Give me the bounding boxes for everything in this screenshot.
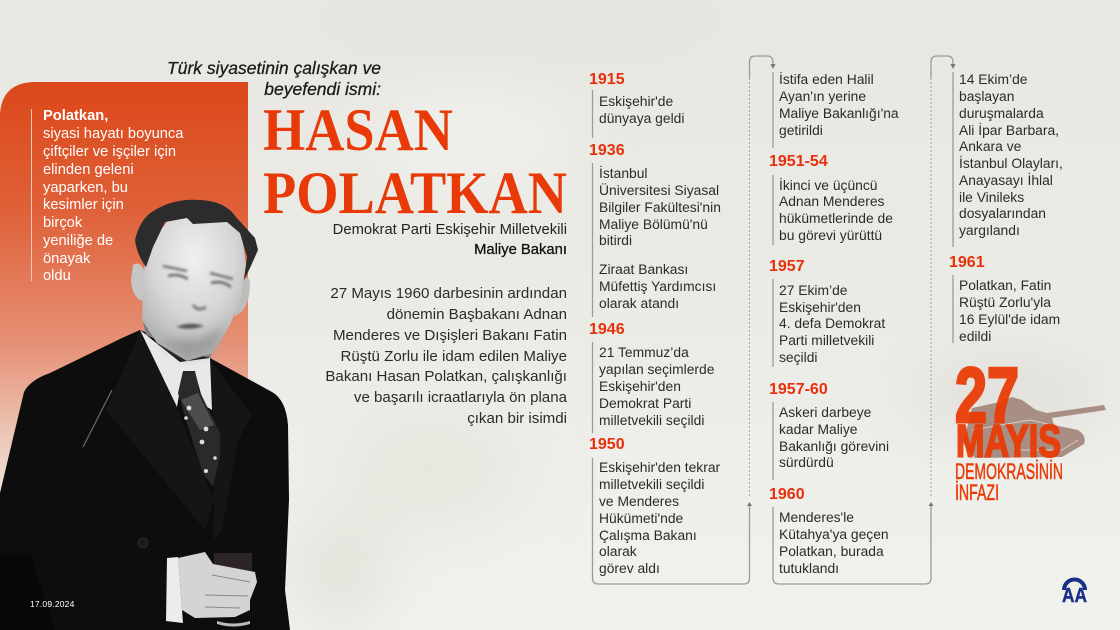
timeline column 1: dünyaya geldi [599,110,684,126]
date: 17.09.2024 [30,599,75,609]
subtitle: Maliye Bakanı [474,242,567,258]
timeline column 2: hükümetlerinde de [779,210,893,226]
intro paragraph: ve başarılı icraatlarıyla ön plana [354,389,567,406]
timeline column 1: 21 Temmuz’da [599,344,689,360]
timeline column 1: 1950 [589,436,625,453]
timeline column 2: 1960 [769,486,805,503]
timeline column 3: 14 Ekim’de [959,71,1027,87]
callout: Polatkan note: yeniliğe de [43,233,113,249]
timeline column 1 [589,71,721,576]
intro paragraph: Menderes ve Dışişleri Bakanı Fatin [333,327,567,344]
timeline column 3: edildi [959,328,991,344]
timeline column 1: İstanbul [599,165,648,181]
intro paragraph: Bakanı Hasan Polatkan, çalışkanlığı [325,368,567,385]
callout: Polatkan note: yaparken, bu [43,180,128,196]
necktie [178,371,220,487]
timeline column 1: olarak atandı [599,295,679,311]
timeline column 1: Maliye Bölümü'nü [599,216,708,232]
timeline column 2: getirildi [779,122,823,138]
timeline column 2: 27 Ekim’de [779,282,847,298]
title [263,98,567,223]
timeline column 1: Müfettiş Yardımcısı [599,278,716,294]
timeline column 1: 1936 [589,142,625,159]
timeline column 1: Hükümeti'nde [599,510,683,526]
timeline column 2: İkinci ve üçüncü [779,177,878,193]
intro paragraph: 27 Mayıs 1960 darbesinin ardından [330,285,567,302]
lapels and jacket shading [106,332,252,540]
title: HASAN [263,98,453,164]
timeline column 1: Ziraat Bankası [599,261,688,277]
timeline column 2: Polatkan, burada [779,543,884,559]
timeline column 1: Eskişehir'den tekrar [599,459,720,475]
subtitle [333,222,567,258]
timeline column 3: yargılandı [959,222,1020,238]
callout: Polatkan note: Polatkan, [43,108,108,124]
timeline column 1: Eskişehir'de [599,93,673,109]
year 1915: 1915 [589,71,625,88]
timeline column 3: başlayan [959,88,1014,104]
callout: Polatkan note: kesimler için [43,197,124,213]
intro paragraph: çıkan bir isimdi [467,410,567,427]
head [131,200,258,361]
timeline column 1: milletvekili seçildi [599,412,704,428]
timeline column 1: milletvekili seçildi [599,476,704,492]
shirt [140,330,212,410]
timeline column 2: Askeri darbeye [779,404,871,420]
intro paragraph [325,285,567,427]
timeline column 2: tutuklandı [779,560,839,576]
timeline column 3: ile Vinileks [959,189,1024,205]
timeline column 3: Rüştü Zorlu'yla [959,294,1051,310]
timeline column 3: İstanbul Olayları, [959,155,1063,171]
27 Mayıs logo with tank [955,360,1106,505]
hand and glass [166,552,257,626]
timeline column 2: Ayan'ın yerine [779,88,866,104]
callout: Polatkan note: çiftçiler ve işçiler için [43,144,176,160]
27 Mayıs logo with tank: İNFAZI [955,480,999,505]
icon: tank [962,397,1106,458]
timeline column 1: görev aldı [599,560,660,576]
timeline column 2: İstifa eden Halil [779,71,874,87]
kicker heading [167,58,381,99]
timeline column 1: bitirdi [599,232,632,248]
timeline column 1: 1946 [589,321,625,338]
timeline column 2: bu görevi yürüttü [779,227,882,243]
timeline column 2: seçildi [779,349,817,365]
timeline column 3: Anayasayı İhlal [959,172,1053,188]
timeline column 3: Polatkan, Fatin [959,277,1051,293]
timeline column 1: yapılan seçimlerde [599,361,714,377]
timeline column 3: dosyalarından [959,205,1046,221]
timeline column 2: Adnan Menderes [779,193,884,209]
portrait photo [0,200,290,630]
27 Mayıs logo with tank: MAYIS [956,416,1061,466]
timeline column 2: Kütahya'ya geçen [779,526,889,542]
timeline column 2: 1951-54 [769,153,828,170]
timeline column 2: Bakanlığı görevini [779,438,889,454]
timeline column 3: Ali İpar Barbara, [959,122,1059,138]
timeline column 1: Eskişehir'den [599,378,681,394]
timeline column 1: olarak [599,543,637,559]
timeline connector lines [592,55,956,585]
timeline column 1: Bilgiler Fakültesi'nin [599,199,721,215]
kicker heading: Türk siyasetinin çalışkan ve [167,58,381,78]
callout: Polatkan note: siyasi hayatı boyunca [43,126,183,142]
timeline column 1: Üniversitesi Siyasal [599,182,719,198]
timeline column 3: duruşmalarda [959,105,1044,121]
timeline column 2: Maliye Bakanlığı'na [779,105,899,121]
timeline column 3: 16 Eylül'de idam [959,311,1060,327]
timeline column 1: Demokrat Parti [599,395,691,411]
AA logo [1062,578,1087,605]
callout: Polatkan note: birçok [43,215,82,231]
timeline column 2: 4. defa Demokrat [779,315,885,331]
timeline column 3: Ankara ve [959,138,1021,154]
timeline column 2: Menderes'le [779,509,854,525]
timeline column 2: Parti milletvekili [779,332,874,348]
intro paragraph: Rüştü Zorlu ile idam edilen Maliye [340,348,567,365]
callout: Polatkan note: elinden geleni [43,162,134,178]
orange panel [0,82,248,492]
callout: Polatkan note [31,108,184,284]
neck [142,318,216,358]
suit [0,330,290,630]
timeline column 2: sürdürdü [779,454,834,470]
subtitle: Demokrat Parti Eskişehir Milletvekili [333,222,567,238]
timeline column 2 [769,71,899,576]
timeline column 3 [949,71,1063,344]
timeline column 3: 1961 [949,254,985,271]
timeline column 2: kadar Maliye [779,421,857,437]
timeline column 2: Eskişehir'den [779,299,861,315]
callout: Polatkan note: önayak [43,251,90,267]
timeline column 1: ve Menderes [599,493,679,509]
timeline column 2: 1957 [769,258,805,275]
timeline column 2: 1957-60 [769,381,828,398]
timeline column 1: Çalışma Bakanı [599,527,697,543]
callout: Polatkan note: oldu [43,268,71,284]
intro paragraph: dönemin Başbakanı Adnan [387,306,567,323]
kicker heading: beyefendi ismi: [264,79,381,99]
